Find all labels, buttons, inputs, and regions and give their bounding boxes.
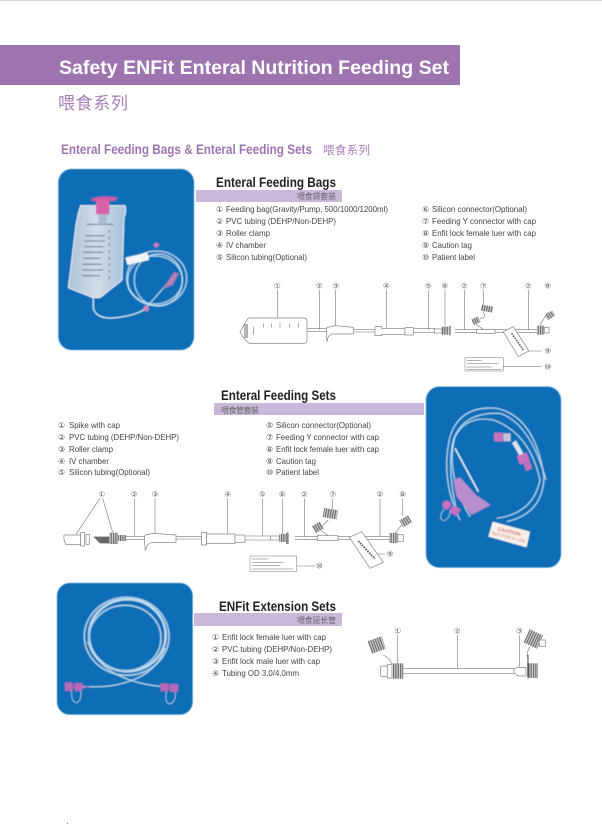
numbers: ⑥ (442, 282, 449, 291)
bag (240, 318, 307, 344)
list: feeding bags components left: ③ (216, 229, 223, 238)
list: feeding sets components right: Feeding Y connector with cap (276, 432, 379, 442)
heading: enteral feeding bags: 喂食袋套装 (297, 191, 336, 201)
list: feeding sets components left: Spike with cap (69, 420, 120, 430)
right luer (514, 629, 545, 678)
list: extension set components: ③ (212, 657, 219, 666)
coil (84, 597, 169, 687)
list: feeding sets components right: ⑤ (266, 421, 273, 430)
list: feeding sets components right: ⑨ (266, 457, 273, 466)
tube (403, 668, 514, 673)
heading: enfit extension sets: 喂食延长管 (297, 615, 336, 625)
list: feeding bags components right: Patient label (432, 252, 475, 262)
list: extension set components: Enfit lock female luer with cap (222, 632, 326, 642)
pink cap (92, 196, 118, 224)
Y connector (477, 329, 495, 333)
tag (125, 252, 149, 265)
list: feeding sets components right: Caution tag (276, 456, 316, 466)
list: feeding sets components right: Enfit lock female luer with cap (276, 444, 379, 454)
list: feeding bags components left: PVC tubing (DEHP/Non-DEHP) (226, 216, 336, 226)
IV chamber (375, 327, 405, 336)
list: feeding bags components left: Feeding bag(Gravity/Pump, 500/1000/1200ml) (226, 204, 388, 214)
list: feeding sets components left: ② (58, 433, 65, 442)
leader lines (76, 498, 403, 566)
list: feeding sets components left: Silicon tubing(Optional) (69, 467, 150, 477)
roller clamp (144, 533, 176, 551)
numbers: ⑧ (544, 282, 551, 291)
left connector (65, 682, 89, 703)
list: feeding sets components left: ① (58, 421, 65, 430)
list: extension set components (212, 632, 332, 678)
diagram: extension set (367, 627, 545, 679)
spike cap (64, 535, 81, 544)
y connector and caps (494, 433, 532, 471)
caution tag (488, 522, 530, 547)
numbers: ③ (332, 282, 339, 291)
list: feeding bags components left: Silicon tubing(Optional) (226, 252, 307, 262)
list: feeding bags components right (422, 204, 536, 262)
numbers: ⑨ (387, 550, 394, 559)
list: feeding bags components right: ⑥ (422, 205, 429, 214)
Y connector (317, 536, 338, 541)
numbers: ② (461, 282, 468, 291)
numbers: ③ (516, 627, 523, 636)
list: feeding sets components left: Roller clamp (69, 444, 113, 454)
spike (93, 537, 109, 543)
numbers: ⑦ (329, 490, 336, 499)
bottom outlet tube (93, 297, 145, 318)
tube (307, 328, 538, 333)
caution tag (503, 327, 529, 357)
heading: enteral feeding bags (196, 174, 342, 202)
numbers: ④ (383, 282, 390, 291)
list: feeding bags components right: Enfit lock female luer with cap (432, 228, 536, 238)
female luer (537, 326, 544, 335)
coiled tubing (127, 251, 187, 309)
numbers (394, 627, 523, 636)
numbers (274, 282, 551, 371)
diagram: feeding bag set (240, 282, 555, 371)
numbers: ① (274, 282, 281, 291)
IV chamber (202, 532, 207, 545)
numbers (98, 490, 406, 571)
bag body (68, 206, 126, 298)
title banner: Safety ENFit Enteral Nutrition Feeding Set (59, 57, 450, 79)
numbers: ⑨ (544, 347, 551, 356)
photo panel: feeding set (426, 387, 561, 568)
list: feeding bags components left: ⑤ (216, 253, 223, 262)
list: extension set components: ④ (212, 669, 219, 678)
list: feeding bags components left: IV chamber (226, 240, 266, 250)
caution tag: NOT FOR IV USE (491, 531, 526, 544)
list: feeding sets components left: IV chamber (69, 456, 109, 466)
numbers: ③ (152, 490, 159, 499)
list: feeding sets components left: ③ (58, 445, 65, 454)
right connector (160, 683, 178, 704)
list: feeding bags components right: ⑦ (422, 217, 429, 226)
section heading: Enteral Feeding Bags & Enteral Feeding Sets (61, 141, 312, 157)
list: feeding bags components left: ① (216, 205, 223, 214)
roller clamp (162, 272, 179, 289)
purple roller clamp (453, 477, 491, 515)
list: feeding sets components right: ⑩ (266, 468, 273, 477)
list: extension set components: PVC tubing (DEHP/Non-DEHP) (222, 644, 332, 654)
list: feeding sets components right: Patient label (276, 467, 319, 477)
list: feeding sets components right: ⑦ (266, 433, 273, 442)
numbers: ⑥ (279, 490, 286, 499)
list: feeding bags components left: ④ (216, 241, 223, 250)
caution tag (349, 532, 383, 568)
list: feeding bags components right: Silicon connector(Optional) (432, 204, 527, 214)
list: feeding bags components right: ⑧ (422, 229, 429, 238)
list: feeding sets components left: ④ (58, 457, 65, 466)
heading: enfit extension sets: ENFit Extension Sets (219, 598, 336, 614)
numbers: ⑧ (399, 490, 406, 499)
numbers: ⑩ (316, 562, 323, 571)
silicon connector (271, 536, 279, 540)
list: feeding bags components left: ② (216, 217, 223, 226)
end cap (441, 501, 461, 521)
section heading: 喂食系列 (323, 143, 370, 157)
numbers: ⑤ (425, 282, 432, 291)
list: feeding bags components left: Roller clamp (226, 228, 270, 238)
heading: enteral feeding sets: 喂食管套装 (221, 405, 259, 415)
numbers: ① (394, 627, 401, 636)
list: feeding sets components left (58, 420, 179, 477)
list: feeding sets components left: PVC tubing (DEHP/Non-DEHP) (69, 432, 179, 442)
numbers: ⑦ (480, 282, 487, 291)
numbers: ① (98, 490, 105, 499)
numbers: ② (316, 282, 323, 291)
heading: enteral feeding bags: Enteral Feeding Bags (216, 174, 336, 190)
chinese title: 喂食系列 (58, 94, 128, 113)
female luer (389, 533, 398, 543)
list: extension set components: Tubing OD 3.0/4.0mm (222, 668, 299, 678)
bag printed text (82, 224, 113, 282)
list: feeding sets components left: ⑤ (58, 468, 65, 477)
photo panel: feeding bag (58, 169, 194, 350)
coiled tubes (447, 408, 546, 522)
caution tag: CAUTION: (497, 526, 522, 538)
list: feeding sets components right (266, 420, 379, 477)
diagram: feeding set (64, 490, 412, 571)
list: feeding bags components right: Feeding Y connector with cap (432, 216, 536, 226)
numbers: ② (131, 490, 138, 499)
title banner (0, 45, 460, 85)
silicon connector (434, 329, 442, 333)
numbers: ② (301, 490, 308, 499)
list: feeding bags components left (216, 204, 388, 262)
heading: enteral feeding sets (214, 387, 424, 415)
list: extension set components: Enfit lock male luer with cap (222, 656, 320, 666)
left luer (367, 636, 403, 679)
roller clamp (326, 326, 353, 342)
photo panel: extension set (57, 583, 193, 715)
list: feeding bags components right: ⑩ (422, 253, 429, 262)
numbers: ⑤ (259, 490, 266, 499)
list: feeding sets components right: ⑧ (266, 445, 273, 454)
numbers: ⑩ (544, 362, 551, 371)
list: feeding sets components right: Silicon connector(Optional) (276, 420, 371, 430)
list: feeding bags components right: ⑨ (422, 241, 429, 250)
tubes (126, 536, 390, 540)
numbers: ② (454, 627, 461, 636)
numbers: ② (377, 490, 384, 499)
patient label (250, 556, 297, 571)
leader lines (398, 635, 519, 669)
numbers: ② (525, 282, 532, 291)
list: extension set components: ① (212, 633, 219, 642)
heading: enfit extension sets (194, 598, 342, 626)
leader lines (277, 290, 548, 367)
numbers: ④ (224, 490, 231, 499)
list: feeding bags components right: Caution tag (432, 240, 472, 250)
patient label (465, 358, 503, 371)
list: extension set components: ② (212, 645, 219, 654)
heading: enteral feeding sets: Enteral Feeding Sets (221, 387, 336, 403)
